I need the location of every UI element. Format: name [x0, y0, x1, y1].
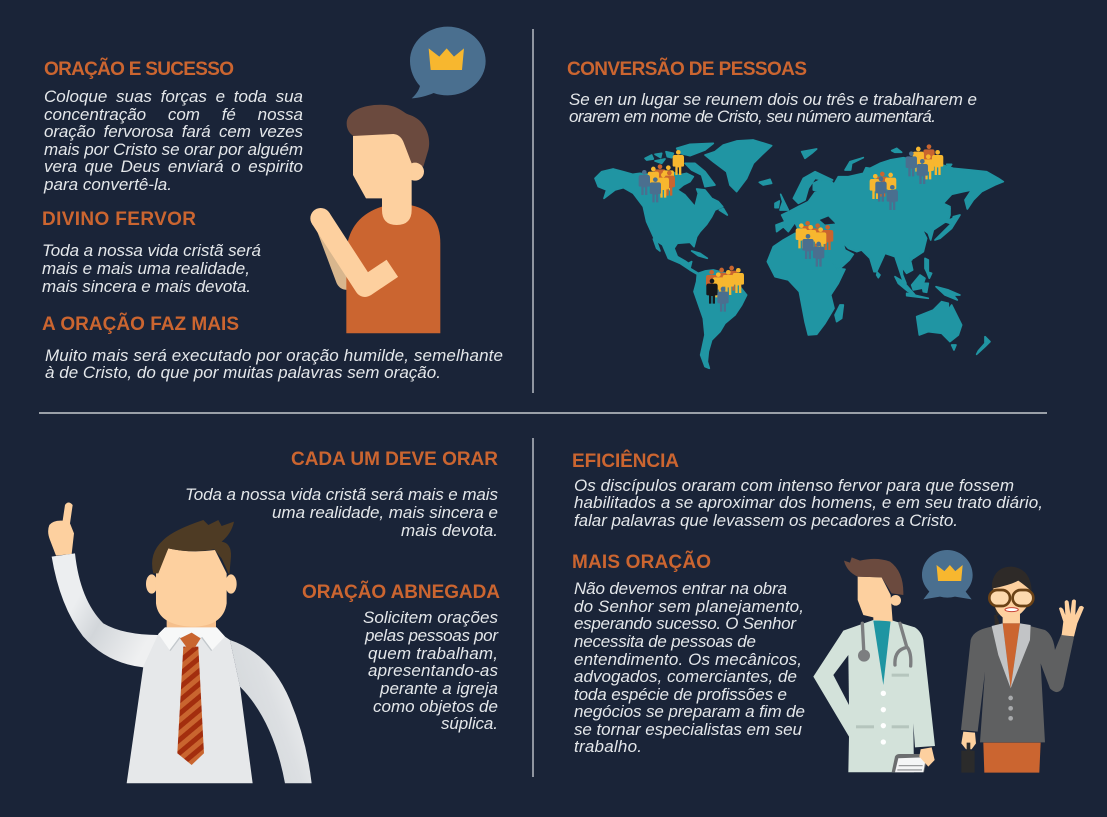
- text block: cada um deve orar: [185, 485, 498, 540]
- text block: mais oração: Não devemos entrar na obra: [574, 579, 787, 598]
- text block: oração abnegada: quem trabalham,: [368, 644, 498, 663]
- text block: a oração faz mais: [45, 346, 503, 382]
- people cluster: North Africa: [796, 221, 833, 267]
- text block: eficiência: [574, 476, 1043, 530]
- heading: conversão de pessoas: CONVERSÃO DE PESSOAS: [567, 58, 807, 80]
- text block: mais oração: do Senhor sem planejamento,: [574, 597, 804, 616]
- text block: oração e sucesso: mais por Cristo se orar por alguém: [44, 140, 303, 159]
- text block: oração abnegada: como objetos de: [373, 697, 498, 716]
- illustration: man in shirt and tie pointing up: [48, 502, 312, 783]
- icon: speech bubble with crown: [922, 550, 973, 599]
- heading: eficiência: EFICIÊNCIA: [572, 450, 679, 472]
- icon: raised hand: [48, 502, 74, 556]
- text block: conversão de pessoas: Se en un lugar se reunem dois ou três e trabalharem e: [569, 90, 977, 109]
- text block: mais oração: [574, 579, 805, 756]
- illustration: doctor and businesswoman: [813, 550, 1084, 773]
- figure: businesswoman: [961, 567, 1084, 773]
- text block: oração abnegada: súplica.: [441, 714, 498, 733]
- text block: mais oração: se tornar especialistas em seu: [574, 720, 803, 739]
- illustration: praying man with speech bubble: [310, 27, 486, 333]
- text block: oração abnegada: [363, 608, 499, 733]
- panel: conversão de pessoas: [567, 58, 977, 126]
- text block: divino fervor: Toda a nossa vida cristã será: [42, 241, 261, 260]
- map: Eurasia, Africa and Oceania: [767, 148, 1003, 354]
- text block: oração abnegada: apresentando-as: [368, 661, 498, 680]
- text block: mais oração: entendimento. Os mecânicos,: [574, 650, 802, 669]
- heading: divino fervor: DIVINO FERVOR: [42, 209, 196, 230]
- panel: oração abnegada: [302, 581, 500, 733]
- figure: head: [146, 520, 237, 628]
- panel: divino fervor: [42, 209, 261, 296]
- text block: mais oração: toda espécie de profissões e: [574, 685, 787, 704]
- panel: cada um deve orar: [185, 449, 498, 540]
- heading: oração e sucesso: ORAÇÃO E SUCESSO: [44, 58, 234, 80]
- people cluster: South America: [706, 266, 744, 312]
- text block: divino fervor: mais sincera e mais devota.: [42, 277, 251, 296]
- panel: eficiência: [572, 450, 1043, 530]
- people cluster: central Asia: [870, 172, 898, 210]
- figure: man: [310, 105, 440, 333]
- icon: speech bubble with crown: [410, 27, 486, 98]
- world map with people clusters: [595, 140, 1003, 368]
- figure: collar and tie: [158, 627, 225, 765]
- panel: mais oração: [572, 551, 805, 756]
- text block: eficiência: habilitados a se aproximar dos homens, e em seu trato diário,: [574, 493, 1043, 512]
- map: Americas and Greenland: [595, 140, 772, 368]
- text block: mais oração: negócios se preparam a fim de: [574, 702, 805, 721]
- people cluster: North America: [639, 150, 684, 202]
- people cluster: northern Asia: [906, 144, 943, 184]
- heading: cada um deve orar: CADA UM DEVE ORAR: [291, 449, 498, 470]
- text block: a oração faz mais: à de Cristo, do que por muitas palavras sem oração.: [45, 363, 441, 382]
- text block: oração abnegada: perante a igreja: [379, 679, 498, 698]
- text block: mais oração: necessita de pessoas de: [574, 632, 756, 651]
- text block: oração abnegada: pelas pessoas por: [364, 626, 499, 645]
- figure: shirt and arms: [52, 553, 312, 783]
- text block: divino fervor: [42, 241, 261, 296]
- text block: conversão de pessoas: orarem em nome de Cristo, seu número aumentará.: [569, 107, 936, 126]
- people clusters on the map: [639, 144, 943, 312]
- text block: mais oração: esperando sucesso. O Senhor: [574, 614, 797, 633]
- heading: a oração faz mais: A ORAÇÃO FAZ MAIS: [42, 313, 239, 335]
- text block: eficiência: Os discípulos oraram com intenso fervor para que fossem: [574, 476, 1014, 495]
- text block: cada um deve orar: uma realidade, mais sincera e: [272, 503, 498, 522]
- heading: mais oração: MAIS ORAÇÃO: [572, 551, 711, 573]
- text block: mais oração: trabalho.: [574, 737, 642, 756]
- text block: cada um deve orar: Toda a nossa vida cristã será mais e mais: [185, 485, 498, 504]
- panel: oração e sucesso: [43, 58, 304, 194]
- text block: mais oração: advogados, comerciantes, de: [574, 667, 797, 686]
- text block: eficiência: falar palavras que levassem os pecadores a Cristo.: [574, 511, 958, 530]
- text block: oração e sucesso: para convertê-la.: [43, 175, 172, 194]
- panel: a oração faz mais: [42, 313, 503, 382]
- text block: oração e sucesso: vera que Deus enviará o espirito: [44, 157, 303, 176]
- text block: oração e sucesso: concentração com fé nossa: [44, 105, 303, 124]
- text block: oração abnegada: Solicitem orações: [363, 608, 498, 627]
- text block: cada um deve orar: mais devota.: [401, 521, 498, 540]
- text block: oração e sucesso: oração fervorosa fará cem vezes: [44, 122, 304, 141]
- heading: oração abnegada: ORAÇÃO ABNEGADA: [302, 581, 500, 603]
- text block: divino fervor: mais e mais uma realidade,: [42, 259, 250, 278]
- text block: a oração faz mais: Muito mais será executado por oração humilde, semelhante: [45, 346, 503, 365]
- text block: oração e sucesso: Coloque suas forças e toda sua: [44, 87, 303, 106]
- figure: doctor: [813, 557, 935, 772]
- text block: conversão de pessoas: [569, 90, 977, 126]
- text block: oração e sucesso: [43, 87, 304, 194]
